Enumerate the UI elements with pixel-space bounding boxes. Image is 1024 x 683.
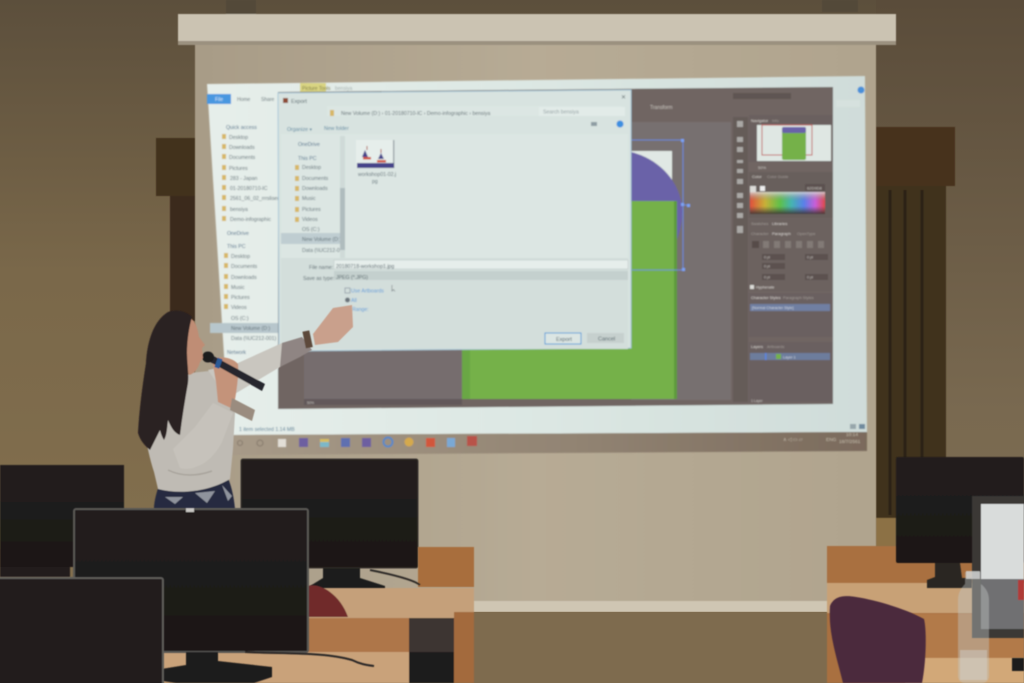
hair	[138, 311, 192, 450]
export dialog: Cancel	[598, 336, 615, 342]
file explorer ribbon: Share	[261, 97, 275, 103]
dialog navigation tree	[281, 142, 343, 254]
dialog navigation tree: New Volume (D:)	[302, 237, 341, 243]
microphone	[203, 352, 265, 391]
export dialog: New Volume (D:) › 01-20180710-IC › Demo-infographic › bensiya	[341, 111, 490, 117]
illustrator color panel	[749, 172, 833, 218]
file explorer navigation tree: OneDrive	[227, 231, 249, 237]
taskbar clock and tray: 18/7/2561	[839, 439, 861, 445]
file explorer ribbon: Picture Tools	[302, 86, 331, 92]
file explorer navigation tree: 1 item selected 1.14 MB	[239, 427, 295, 433]
file explorer navigation tree: Downloads	[229, 145, 255, 151]
right laptop	[972, 496, 1024, 671]
blouse	[144, 371, 235, 492]
export dialog: Search bensiya	[543, 110, 579, 116]
explorer view toggles	[850, 424, 865, 429]
explorer top right help icon	[836, 86, 864, 107]
illustrator character styles panel	[749, 293, 833, 337]
taskbar clock and tray: ∧ ◁ ▭ ▱	[783, 437, 803, 443]
illustrator paragraph panel: 0 pt	[807, 276, 813, 280]
left monitor	[0, 465, 124, 577]
file explorer navigation tree: Demo-infographic	[230, 217, 271, 223]
file explorer navigation tree: Videos	[231, 305, 247, 311]
foreground monitor	[74, 508, 374, 683]
file explorer navigation tree: New Volume (D:)	[231, 326, 270, 332]
file explorer navigation tree	[210, 125, 295, 433]
illustrator layers panel: Layers	[751, 344, 763, 349]
taskbar icons	[238, 436, 477, 447]
maroon chair	[830, 596, 926, 683]
illustrator layers panel: 1 Layer	[751, 399, 764, 403]
illustrator navigator panel	[749, 115, 833, 170]
right monitor	[896, 457, 1024, 588]
export dialog: Range:	[352, 307, 369, 313]
projected desktop	[207, 76, 867, 455]
illustrator top bar: Transform	[650, 105, 673, 111]
taskbar clock and tray: ENG	[826, 437, 837, 443]
export dialog: Export	[556, 337, 572, 343]
illustrator color panel: 62D9D8	[807, 186, 822, 190]
export dialog: JPEG (*.JPG)	[336, 275, 368, 281]
illustrator status strip	[304, 399, 462, 405]
export dialog: 20180718-workshop1.jpg	[336, 264, 394, 270]
dialog navigation tree: Videos	[302, 217, 318, 223]
dialog navigation tree: OS (C:)	[302, 227, 320, 233]
illustrator layers panel: Artboards	[767, 344, 784, 349]
file explorer navigation tree: Documents	[229, 155, 256, 161]
illustrator paragraph panel: 0 pt	[764, 256, 770, 260]
dialog navigation tree: Documents	[302, 176, 329, 182]
file explorer ribbon: bensiya	[335, 86, 352, 92]
file name fields	[281, 258, 628, 349]
file explorer ribbon: Home	[237, 97, 251, 103]
card under the microphone	[230, 398, 255, 421]
dialog navigation tree: Music	[302, 196, 316, 202]
artboard options	[345, 288, 350, 293]
illustrator artboard area	[631, 122, 731, 400]
file explorer navigation tree: Quick access	[226, 125, 257, 131]
export dialog: New folder	[324, 126, 349, 132]
toolbar: Organize ▾	[287, 127, 312, 133]
green rectangle shape	[462, 201, 677, 399]
file explorer navigation tree: Network	[227, 350, 246, 356]
file explorer navigation tree: Music	[231, 285, 245, 291]
file explorer navigation tree: bensiya	[230, 207, 248, 213]
export dialog: All	[351, 298, 357, 304]
illustrator paragraph panel: OpenType	[797, 231, 816, 236]
illustrator status strip: 50%	[307, 401, 314, 405]
illustrator layers panel: Layer 1	[783, 356, 796, 360]
file explorer navigation tree: Desktop	[231, 254, 250, 260]
illustrator paragraph panel: 0 pt	[764, 264, 770, 268]
sleeve of pointing arm	[208, 337, 305, 398]
export dialog	[278, 90, 631, 351]
illustrator tool strip	[733, 117, 748, 402]
file explorer navigation tree: Pictures	[229, 166, 248, 172]
dialog file area	[281, 134, 628, 258]
hand on microphone	[212, 357, 238, 409]
face	[182, 318, 205, 375]
illustrator paragraph panel: Swatches	[751, 221, 768, 226]
presenter	[138, 305, 353, 509]
foreground left monitor	[0, 578, 163, 683]
water bottle	[958, 571, 989, 683]
dialog navigation tree: Pictures	[302, 207, 321, 213]
illustrator paragraph panel: Libraries	[772, 221, 787, 226]
workshop file thumbnail: workshop01-02.j	[358, 172, 396, 178]
illustrator navigator panel: 50%	[758, 165, 766, 170]
file explorer navigation tree: Pictures	[231, 295, 250, 301]
purple ellipse shape	[631, 152, 682, 250]
file explorer navigation tree: 283 - Japan	[230, 176, 258, 182]
dialog navigation tree: Desktop	[302, 165, 321, 171]
dialog navigation tree: Data (\\UC212-00	[302, 248, 343, 254]
illustrator character styles panel: Paragraph Styles	[783, 295, 814, 300]
left desks	[162, 547, 474, 683]
projection screen	[178, 0, 896, 612]
illustrator paragraph panel: 0 pt	[807, 256, 813, 260]
illustrator navigator panel: Navigator	[751, 118, 769, 123]
lower wall below screen	[472, 612, 876, 683]
illustrator paragraph panel: Paragraph	[772, 231, 791, 236]
illustrator layers panel	[749, 342, 833, 403]
illustrator character styles panel: [Normal Character Style]	[752, 306, 794, 310]
export and cancel buttons	[545, 333, 581, 344]
explorer folder icons	[222, 134, 228, 309]
export dialog: Save as type:	[303, 276, 334, 282]
file explorer ribbon: File	[215, 97, 223, 103]
center monitor	[241, 459, 418, 592]
file explorer navigation tree: This PC	[227, 244, 246, 250]
illustrator paragraph panel: Character	[751, 231, 769, 236]
file explorer navigation tree: Downloads	[231, 275, 257, 281]
left curtain	[156, 138, 196, 321]
dialog title	[283, 98, 288, 103]
selection bounding box	[631, 140, 689, 270]
illustrator paragraph panel: Hyphenate	[756, 286, 774, 290]
illustrator paragraph panel: 0 pt	[764, 276, 770, 280]
file explorer navigation tree: Desktop	[229, 135, 248, 141]
illustrator color panel: Color	[752, 174, 762, 179]
dialog navigation tree: OneDrive	[298, 142, 320, 148]
taskbar glow	[229, 432, 867, 455]
taskbar clock and tray	[783, 432, 861, 445]
skirt	[154, 478, 235, 509]
artboard white corner	[631, 151, 672, 206]
dialog navigation tree: Downloads	[302, 186, 328, 192]
illustrator paragraph panel	[749, 219, 833, 291]
illustrator color panel: Color Guide	[767, 174, 789, 179]
export dialog: ✕	[621, 95, 626, 101]
workshop file thumbnail: pg	[372, 179, 378, 185]
export dialog: Export	[291, 99, 307, 105]
breadcrumb bar	[327, 106, 622, 116]
file explorer navigation tree: Data (\\UC212-001)	[231, 336, 277, 342]
illustrator navigator panel: Info	[772, 118, 779, 123]
right curtain	[876, 127, 955, 546]
file explorer navigation tree: 01-20180710-IC	[230, 186, 268, 192]
workshop file thumbnail	[356, 140, 396, 185]
dialog navigation tree: This PC	[298, 156, 317, 162]
projected window background	[207, 76, 867, 435]
file explorer navigation tree: OS (C:)	[231, 316, 249, 322]
file explorer ribbon	[207, 83, 352, 104]
right side desks	[827, 546, 1024, 683]
front forearm sleeve	[173, 403, 233, 469]
export dialog: File name:	[309, 265, 333, 271]
illustrator character styles panel: Character Styles	[751, 295, 781, 300]
hand with watch	[313, 305, 353, 345]
file explorer navigation tree: Documents	[231, 264, 258, 270]
taskbar clock and tray: 10:14	[846, 432, 858, 438]
export dialog: Use Artboards	[351, 288, 384, 294]
illustrator window	[278, 87, 833, 409]
file explorer navigation tree: 2561_06_02_rrrsliseri	[230, 196, 280, 202]
